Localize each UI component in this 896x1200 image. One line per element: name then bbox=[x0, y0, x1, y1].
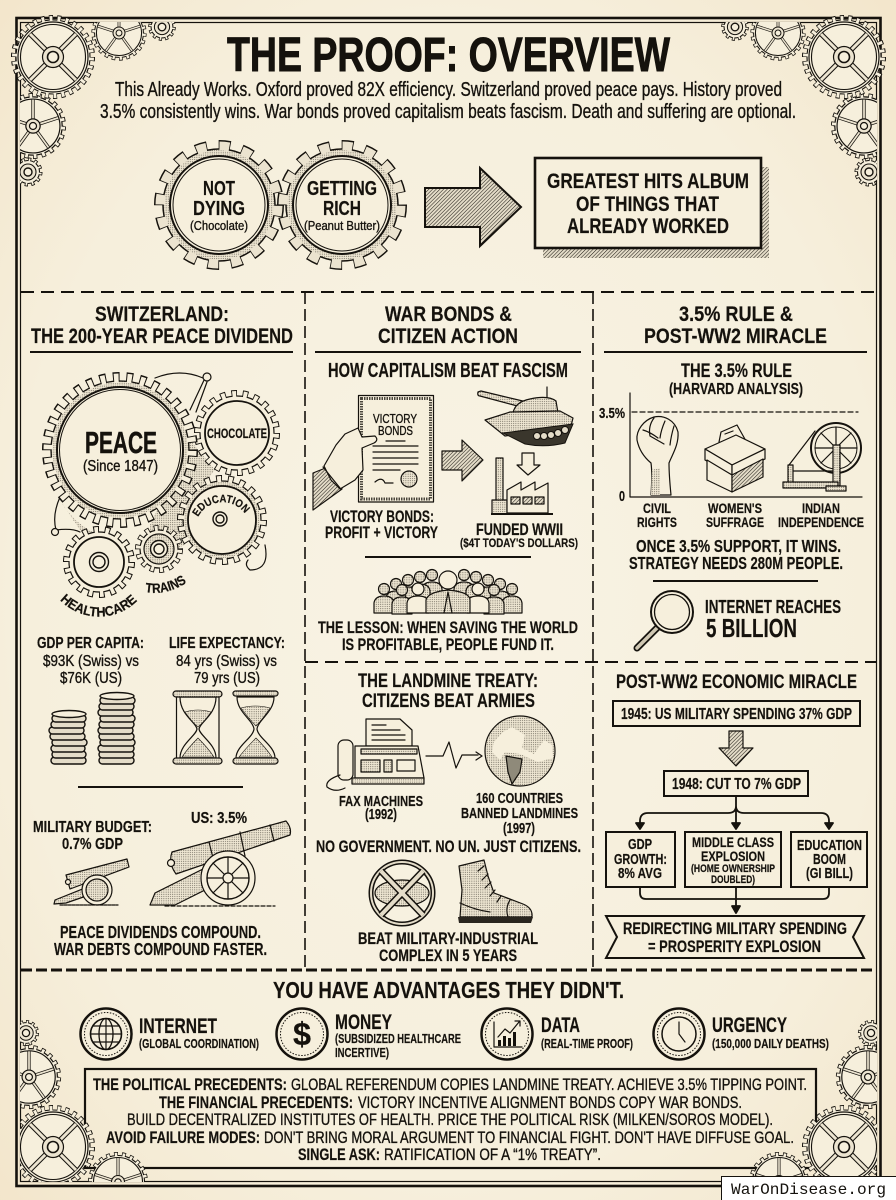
gear: peace: PEACE bbox=[85, 425, 157, 460]
icon: signal arrow bbox=[426, 742, 482, 768]
box: precedents: AVOID FAILURE MODES: bbox=[106, 1129, 260, 1147]
title: THE PROOF: OVERVIEW bbox=[227, 29, 671, 82]
box: precedents: THE POLITICAL PRECEDENTS: bbox=[93, 1076, 287, 1094]
text: the lesson: THE LESSON: WHEN SAVING THE WORLD bbox=[318, 618, 578, 637]
watermark bbox=[722, 1176, 896, 1200]
stat: life expectancy: 84 yrs (Swiss) vs bbox=[176, 653, 277, 670]
advantage: internet: INTERNET bbox=[139, 1015, 217, 1038]
icon: fax machine bbox=[327, 719, 424, 790]
stat: military budget bbox=[33, 819, 152, 853]
advantage: money bbox=[276, 1008, 461, 1060]
text: fax machines caption: (1992) bbox=[365, 807, 397, 823]
box: middle class: (HOME OWNERSHIP bbox=[691, 863, 775, 875]
heading: war bonds: CITIZEN ACTION bbox=[378, 325, 518, 348]
box: 1948 bbox=[664, 771, 808, 796]
callout: greatest hits: ALREADY WORKED bbox=[567, 215, 729, 238]
arrow bbox=[517, 453, 540, 475]
panel: landmine treaty bbox=[316, 670, 581, 965]
panel: 3.5% rule bbox=[599, 303, 867, 648]
box: education boom bbox=[791, 832, 867, 887]
text: internet reaches 5 billion bbox=[705, 597, 841, 643]
gear: getting rich: RICH bbox=[323, 198, 361, 220]
heading: war bonds: WAR BONDS & bbox=[385, 303, 512, 326]
advantage: money: $ bbox=[293, 1016, 311, 1052]
gear: education: EDUCATION bbox=[192, 494, 250, 517]
callout: greatest hits: GREATEST HITS ALBUM bbox=[547, 170, 749, 193]
intro text bbox=[100, 79, 796, 123]
text: the lesson: IS PROFITABLE, PEOPLE FUND IT. bbox=[342, 635, 554, 654]
box: gdp growth: GDP bbox=[628, 837, 652, 853]
illustration: factory bbox=[491, 458, 553, 514]
stat: gdp per capita: GDP PER CAPITA: bbox=[37, 635, 144, 652]
box: precedents: SINGLE ASK: bbox=[298, 1146, 380, 1164]
icon: globe bbox=[485, 716, 555, 786]
advantage: urgency bbox=[654, 1008, 829, 1060]
text: 160 countries caption: (1997) bbox=[503, 821, 535, 837]
heading: 3.5% rule: 3.5% RULE & bbox=[679, 303, 793, 326]
section dividers bbox=[21, 292, 877, 970]
box: middle class: EXPLOSION bbox=[701, 848, 765, 864]
text: 160 countries caption bbox=[461, 791, 578, 837]
stat: gdp per capita: $93K (Swiss) vs bbox=[43, 653, 139, 670]
box: precedents bbox=[85, 1069, 816, 1168]
advantage: data bbox=[482, 1008, 633, 1060]
box: gdp growth: 8% AVG bbox=[618, 866, 662, 882]
heading: switzerland bbox=[30, 303, 293, 352]
stat: life expectancy: LIFE EXPECTANCY: bbox=[169, 635, 285, 652]
box: precedents: RATIFICATION OF A “1% TREATY”. bbox=[384, 1146, 601, 1164]
stat: military budget: 0.7% GDP bbox=[62, 836, 123, 853]
box: gdp growth bbox=[606, 832, 675, 887]
chart: 3.5% threshold: 0 bbox=[619, 489, 625, 505]
text: funded wwii caption bbox=[460, 521, 578, 550]
icon: spinning wheel bbox=[783, 423, 861, 491]
text: victory bonds caption: PROFIT + VICTORY bbox=[325, 524, 438, 542]
box: 1945 bbox=[613, 701, 860, 726]
stat: us budget: US: 3.5% bbox=[191, 810, 247, 827]
illustration: hand holding bond bbox=[313, 428, 377, 510]
stat: military budget: MILITARY BUDGET: bbox=[33, 819, 152, 836]
subheading: the 3.5% rule bbox=[669, 361, 803, 398]
stat: gdp per capita: $76K (US) bbox=[60, 670, 122, 687]
text: beat military-industrial: COMPLEX IN 5 YEARS bbox=[379, 946, 517, 965]
watermark: WarOnDisease.org bbox=[731, 1181, 886, 1199]
advantage: money: MONEY bbox=[335, 1011, 392, 1034]
text: peace dividends bbox=[54, 922, 267, 959]
gear: getting rich: (Peanut Butter) bbox=[304, 218, 380, 233]
labels: movements: INDEPENDENCE bbox=[778, 514, 864, 530]
subheading: how capitalism beat fascism: HOW CAPITALISM BEAT FASCISM bbox=[328, 360, 568, 382]
gear: getting rich bbox=[282, 144, 402, 266]
heading: switzerland: THE 200-YEAR PEACE DIVIDEND bbox=[31, 325, 293, 348]
text: funded wwii caption: FUNDED WWII bbox=[476, 521, 563, 539]
interlocking gears: not dying and getting rich bbox=[158, 144, 402, 266]
advantage: money: (SUBSIDIZED HEALTHCARE bbox=[335, 1031, 461, 1046]
banner: redirecting spending: = PROSPERITY EXPLOSION bbox=[648, 937, 821, 956]
heading: landmine treaty: THE LANDMINE TREATY: bbox=[358, 670, 538, 692]
labels: movements: RIGHTS bbox=[637, 514, 677, 530]
icon: big cannon bbox=[150, 821, 290, 906]
gear: not dying bbox=[158, 144, 280, 266]
gear: education bbox=[177, 475, 267, 565]
box: 1948: 1948: CUT TO 7% GDP bbox=[672, 776, 801, 793]
advantage: internet: (GLOBAL COORDINATION) bbox=[139, 1036, 259, 1051]
illustration: gear cluster bbox=[42, 372, 280, 617]
labels: movements: SUFFRAGE bbox=[706, 514, 764, 530]
arrow bbox=[425, 168, 521, 246]
text: peace dividends: WAR DEBTS COMPOUND FASTER. bbox=[54, 939, 267, 959]
labels: movements: CIVIL bbox=[643, 500, 671, 516]
text: internet reaches 5 billion: INTERNET REACHES bbox=[705, 597, 841, 617]
advantage: data: DATA bbox=[541, 1014, 580, 1037]
text: victory bonds caption bbox=[325, 508, 438, 542]
stat: life expectancy bbox=[169, 635, 285, 687]
illustration: victory bond certificate: BONDS bbox=[378, 423, 413, 438]
advantage: urgency: URGENCY bbox=[712, 1014, 787, 1037]
gear: healthcare bbox=[60, 526, 138, 617]
icon: small cannon bbox=[54, 859, 129, 905]
advantage: internet bbox=[80, 1008, 259, 1060]
text: the lesson bbox=[318, 618, 578, 654]
advantage: urgency: (150,000 DAILY DEATHS) bbox=[712, 1036, 829, 1051]
icon: ballot box bbox=[705, 425, 765, 492]
text: once 3.5% support: ONCE 3.5% SUPPORT, IT WINS. bbox=[636, 536, 841, 556]
panel: post-ww2 miracle bbox=[606, 672, 867, 958]
gear: getting rich: GETTING bbox=[307, 178, 377, 200]
icon: hourglasses bbox=[173, 691, 278, 764]
icon: coin stacks bbox=[49, 692, 135, 764]
text: internet reaches 5 billion: 5 BILLION bbox=[706, 613, 797, 643]
icon: crossed-out landmine bbox=[371, 862, 433, 924]
labels: movements bbox=[637, 500, 864, 530]
stat: gdp per capita bbox=[37, 635, 144, 687]
arrow bbox=[719, 731, 753, 766]
box: middle class: DOUBLED) bbox=[711, 874, 755, 886]
icon: raised fist bbox=[637, 417, 678, 495]
banner: redirecting spending bbox=[606, 916, 864, 958]
panel: switzerland bbox=[30, 303, 293, 959]
illustration: victory bond certificate bbox=[358, 396, 434, 502]
text: funded wwii caption: ($4T TODAY'S DOLLARS) bbox=[460, 536, 578, 550]
labels: movements: INDIAN bbox=[802, 500, 840, 516]
advantage: money: INCERTIVE) bbox=[335, 1045, 389, 1060]
illustration: victory bond certificate: VICTORY bbox=[373, 411, 417, 426]
callout: greatest hits: OF THINGS THAT bbox=[576, 193, 719, 216]
subheading: the 3.5% rule: (HARVARD ANALYSIS) bbox=[669, 381, 803, 398]
gear: not dying: NOT bbox=[203, 178, 235, 200]
gear: trains bbox=[135, 525, 186, 594]
stat: life expectancy: 79 yrs (US) bbox=[194, 670, 260, 687]
gear: peace bbox=[46, 376, 194, 524]
text: beat military-industrial: BEAT MILITARY-INDUSTRIAL bbox=[358, 929, 538, 948]
gear: trains: TRAINS bbox=[146, 576, 186, 594]
arrow bbox=[442, 440, 483, 481]
text: once 3.5% support bbox=[629, 536, 843, 573]
box: precedents: VICTORY INCENTIVE ALIGNMENT BONDS COPY WAR BONDS. bbox=[358, 1094, 742, 1112]
subheading: the 3.5% rule: THE 3.5% RULE bbox=[681, 361, 792, 382]
connectors bbox=[636, 796, 833, 913]
gear: not dying: (Chocolate) bbox=[190, 218, 248, 233]
chart: 3.5% threshold: 3.5% bbox=[599, 406, 625, 422]
box: middle class: MIDDLE CLASS bbox=[692, 834, 774, 850]
gear: healthcare: HEALTHCARE bbox=[60, 594, 138, 617]
heading: landmine treaty bbox=[358, 670, 538, 712]
heading: landmine treaty: CITIZENS BEAT ARMIES bbox=[362, 690, 535, 712]
heading: war bonds bbox=[315, 303, 581, 352]
labels: movements: WOMEN'S bbox=[708, 500, 762, 516]
heading: 3.5% rule bbox=[604, 303, 867, 352]
illustration: crowd bbox=[374, 570, 522, 614]
icon: boot bbox=[458, 860, 533, 923]
text: beat military-industrial bbox=[358, 929, 538, 965]
heading: advantages: YOU HAVE ADVANTAGES THEY DIDN'T. bbox=[273, 977, 624, 1003]
gear: peace: (Since 1847) bbox=[83, 458, 158, 475]
box: precedents: THE FINANCIAL PRECEDENTS: bbox=[159, 1094, 353, 1112]
box: middle class bbox=[685, 832, 781, 887]
text: victory bonds caption: VICTORY BONDS: bbox=[330, 508, 434, 526]
gear: chocolate: CHOCOLATE bbox=[207, 425, 267, 441]
box: education boom: (GI BILL) bbox=[806, 866, 853, 882]
text: 160 countries caption: BANNED LANDMINES bbox=[461, 806, 578, 822]
text: no government: NO GOVERNMENT. NO UN. JUST CITIZENS. bbox=[316, 837, 581, 856]
callout: greatest hits bbox=[535, 158, 769, 258]
text: fax machines caption: FAX MACHINES bbox=[339, 794, 423, 810]
heading: 3.5% rule: POST-WW2 MIRACLE bbox=[644, 325, 827, 348]
panel: war bonds bbox=[313, 303, 581, 654]
gear: not dying: DYING bbox=[193, 198, 245, 220]
panel: advantages bbox=[80, 977, 829, 1168]
box: gdp growth: GROWTH: bbox=[614, 852, 667, 868]
box: education boom: BOOM bbox=[813, 852, 846, 868]
gear: chocolate bbox=[197, 393, 277, 473]
illustration: tank bbox=[478, 387, 573, 446]
box: education boom: EDUCATION bbox=[797, 838, 862, 854]
text: 160 countries caption: 160 COUNTRIES bbox=[476, 791, 563, 807]
chart: 3.5% threshold bbox=[599, 393, 864, 530]
icon: magnifying glass bbox=[637, 591, 693, 648]
text: peace dividends: PEACE DIVIDENDS COMPOUND. bbox=[60, 922, 261, 942]
advantage: data: (REAL-TIME PROOF) bbox=[541, 1036, 633, 1051]
heading: switzerland: SWITZERLAND: bbox=[95, 303, 229, 326]
text: fax machines caption bbox=[339, 794, 423, 823]
